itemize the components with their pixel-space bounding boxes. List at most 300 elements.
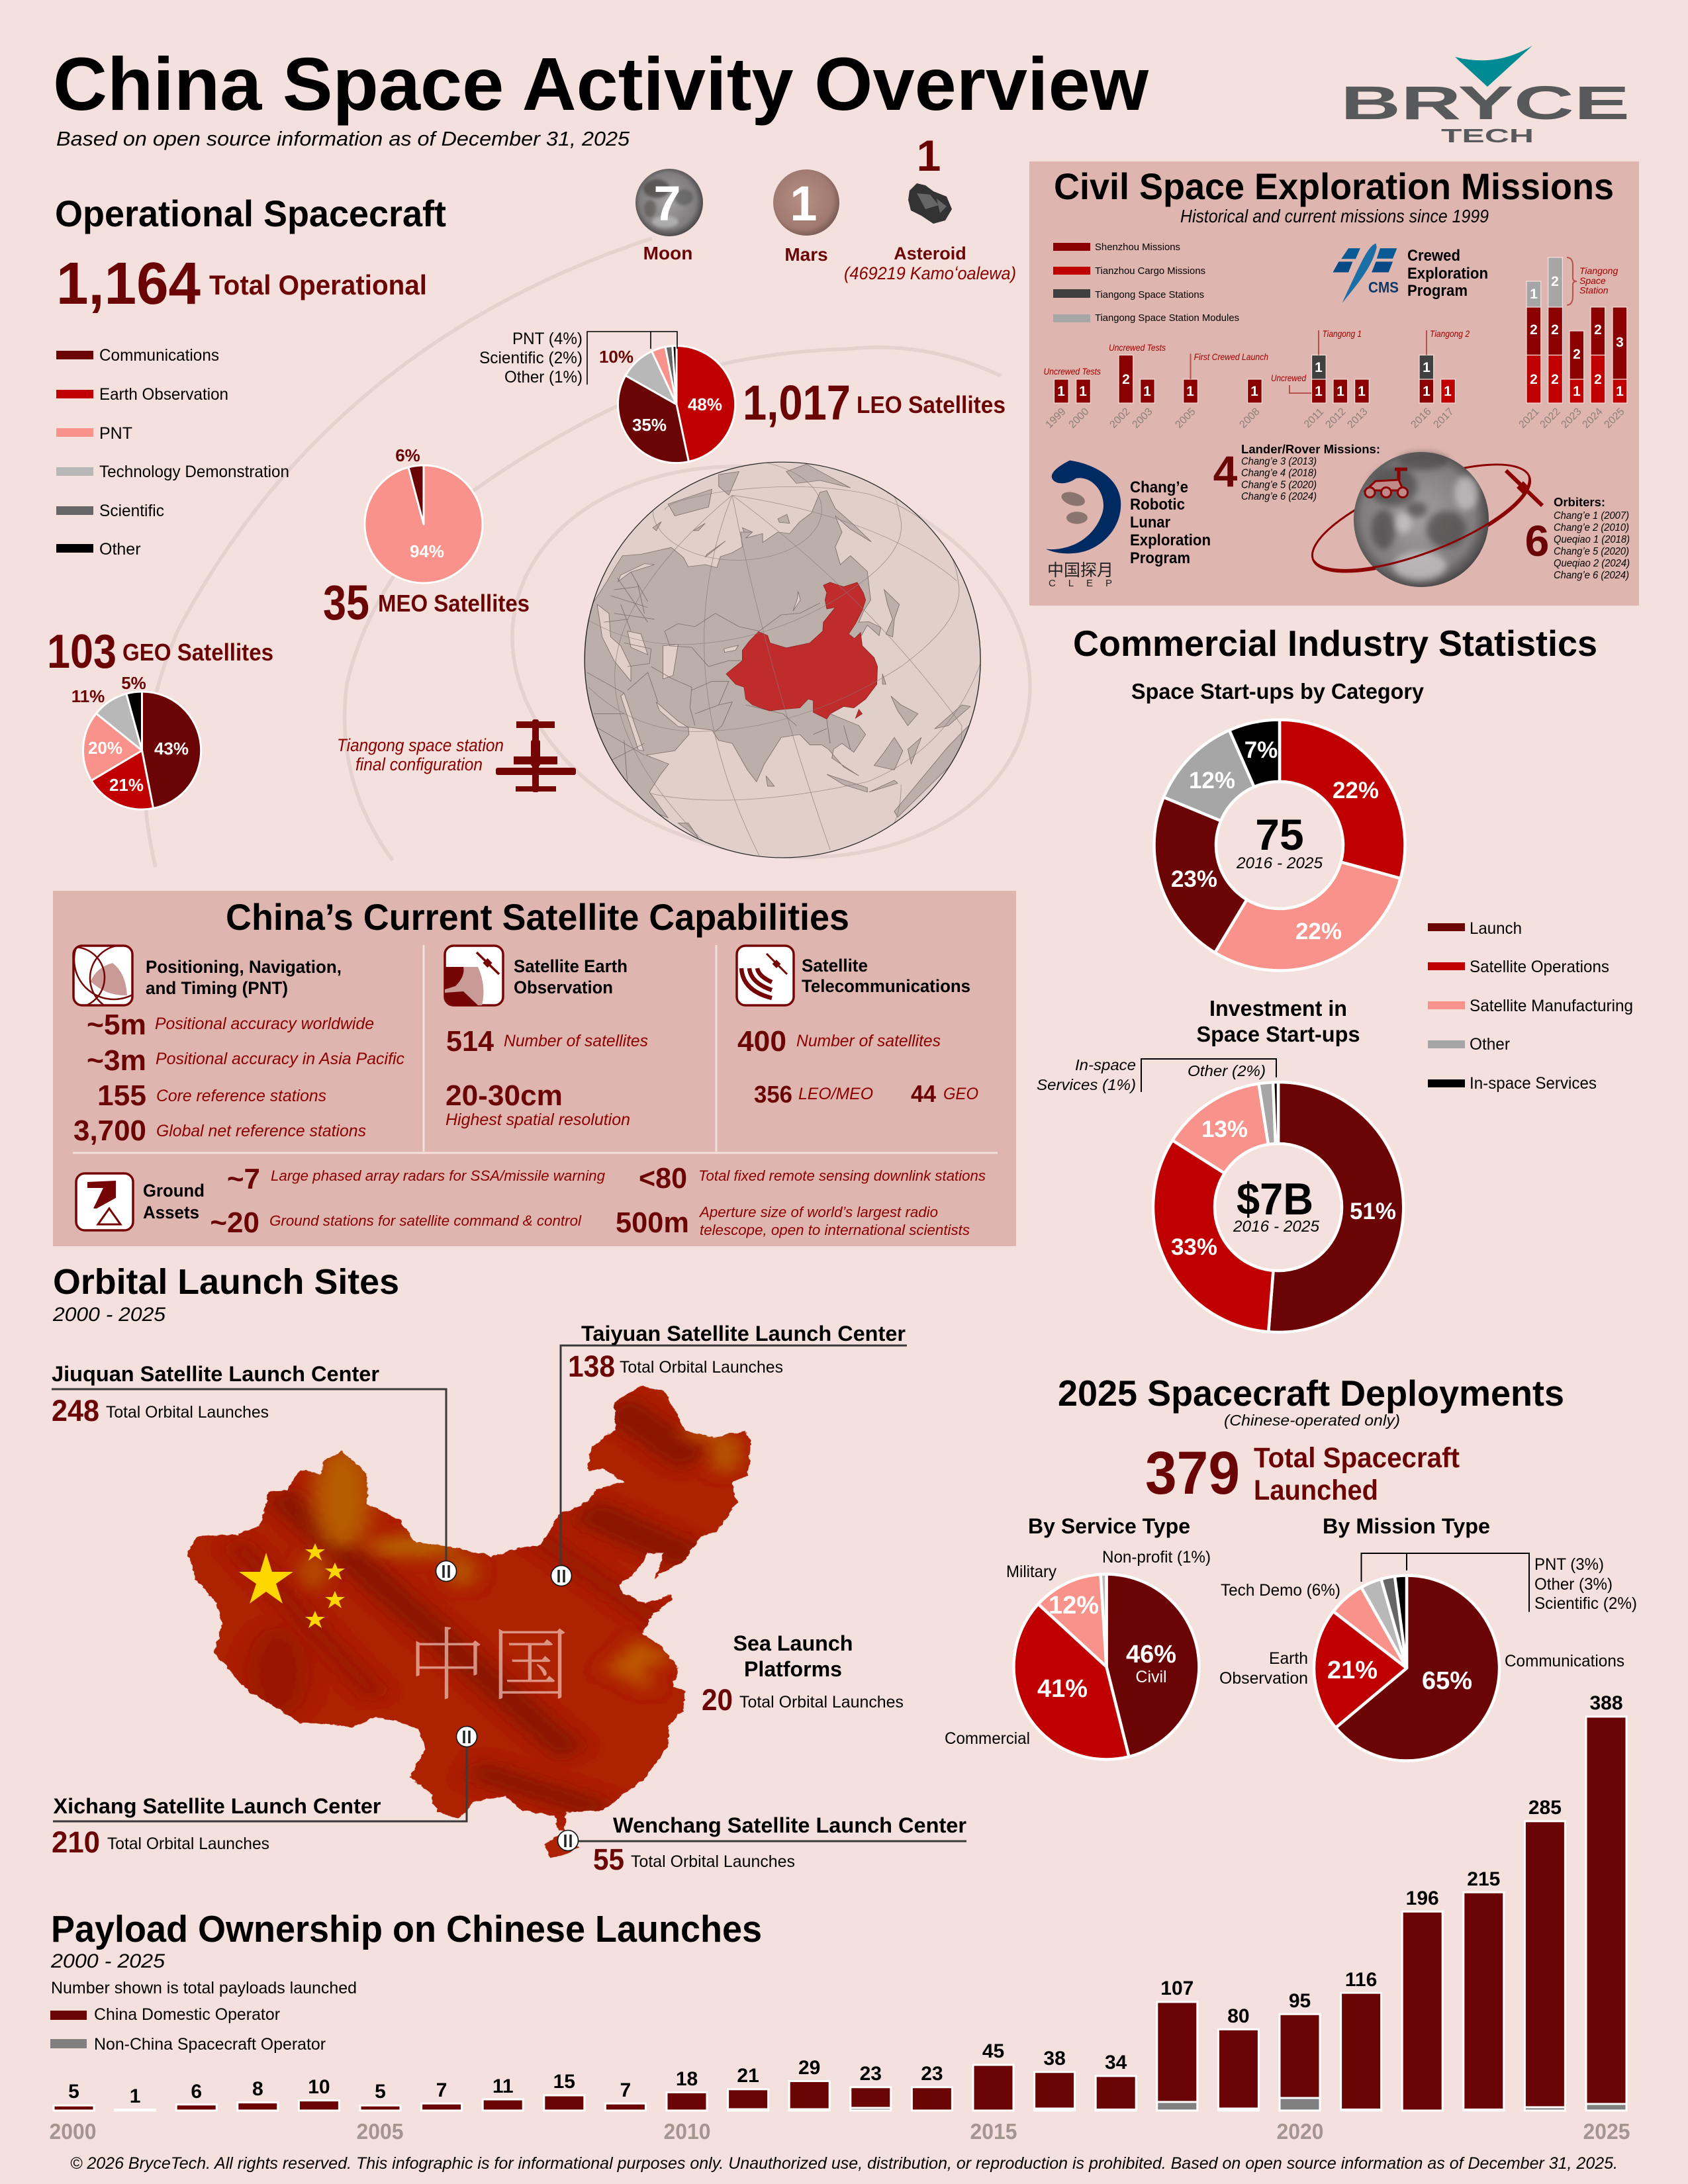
bar: 2017: 34 (1105, 2052, 1127, 2073)
pie: LEO satellites (479, 330, 735, 463)
site: sea launch: Sea Launch (733, 1631, 853, 1655)
site: sea launch (702, 1631, 904, 1717)
stat: lander missions: Chang’e 5 (2020) (1241, 479, 1317, 491)
bar: 2011: 21 (737, 2065, 759, 2087)
bar: 2016: 38 (1043, 2048, 1066, 2070)
donut: investment: 33% (1171, 1234, 1217, 1260)
icon: mars with count (773, 169, 839, 265)
label: PNT (146, 957, 342, 998)
bar chart: crewed missions by year: Uncrewed (1271, 373, 1307, 383)
pie: GEO satellites: 20% (88, 738, 122, 758)
site: Jiuquan: 248 (52, 1394, 99, 1428)
stats: telecommunications: 44 (911, 1080, 936, 1107)
legend: spacecraft mission: PNT (99, 424, 132, 443)
bar chart: crewed missions by year: 1 (1250, 384, 1258, 399)
land borders (587, 572, 851, 785)
label: LEO satellites: 1,017 (743, 375, 851, 430)
logo: CMS (1333, 244, 1399, 303)
bar: 2020 (1280, 1990, 1320, 2111)
axis: year labels: 2005 (356, 2119, 404, 2144)
site: sea launch: 20 (702, 1683, 733, 1717)
label: crewed exploration program (1407, 247, 1488, 300)
logo: BryceTech: BRYCE (1340, 77, 1630, 130)
legend: spacecraft mission: Scientific (99, 502, 164, 520)
legend: commercial: In-space Services (1470, 1074, 1597, 1093)
bar: 2004: 10 (308, 2076, 330, 2098)
stats: PNT: Core reference stations (156, 1087, 326, 1105)
bar: 2015 (973, 2040, 1013, 2111)
heading: operational spacecraft: Operational Spacecraft (55, 193, 446, 234)
pie: mission type: Observation (1219, 1669, 1308, 1688)
bar chart: crewed missions by year: Uncrewed Tests (1043, 366, 1101, 377)
bar: 2011 (728, 2065, 769, 2111)
icon: orbiter satellite (1506, 471, 1542, 506)
legend: spacecraft mission (56, 346, 289, 559)
stat: lander missions: Chang’e 4 (2018) (1241, 467, 1317, 479)
logo: CLEP: CLEP (1049, 578, 1112, 589)
stat: total spacecraft launched: Launched (1254, 1475, 1378, 1506)
label: earth observation: Observation (514, 978, 613, 997)
stats: PNT: Positional accuracy worldwide (155, 1015, 374, 1033)
footer: © 2026 BryceTech. All rights reserved. This infographic is for informational purposes only. Unauthorized use, distribution, or reproduction is prohibited. Based on open source information as of December 31, 2025. (70, 2154, 1618, 2173)
logo: BryceTech (1340, 46, 1630, 147)
bar chart: crewed missions by year: 1 (1423, 360, 1430, 375)
label: GEO satellites (47, 625, 273, 678)
site: Wenchang (578, 1813, 966, 1876)
label: earth observation: Satellite Earth (514, 956, 628, 976)
pie: LEO satellites: PNT (4%) (512, 330, 583, 348)
legend: spacecraft mission: Technology Demonstration (99, 463, 289, 481)
pie: LEO satellites: 35% (632, 415, 667, 435)
bar chart: crewed missions by year: 2 (1551, 274, 1559, 289)
bar chart: crewed missions by year: 2 (1551, 322, 1559, 338)
pie: MEO satellites: 94% (410, 541, 444, 561)
bar: 2005 (360, 2081, 400, 2111)
china highlight (726, 582, 878, 719)
legend: spacecraft mission: Communications (99, 346, 219, 365)
legend: payload: Non-China Spacecraft Operator (94, 2035, 326, 2054)
site: Taiyuan: 138 (568, 1349, 615, 1383)
icon: asteroid with count (844, 131, 1016, 283)
donut: investment: 13% (1201, 1116, 1248, 1142)
moon with orbit (1300, 443, 1542, 594)
icon: moon with count: Moon (643, 243, 692, 263)
bar chart: crewed missions by year: Tiangong (1579, 265, 1618, 276)
bar chart: crewed missions by year: 1 (1358, 384, 1366, 399)
heading: civil space: Civil Space Exploration Missions (1054, 165, 1614, 207)
site: Jiuquan (52, 1362, 446, 1563)
stats: PNT: ~5m (87, 1009, 146, 1041)
axis: year labels: 2000 (49, 2119, 97, 2144)
bar chart: crewed missions by year: 1 (1336, 384, 1344, 399)
map: China flag (174, 1381, 762, 1863)
axis: year labels: 2025 (1583, 2119, 1630, 2144)
label: Chang'e program: Robotic (1130, 496, 1185, 514)
bar chart: crewed missions by year: 1 (1423, 384, 1430, 399)
site: Taiyuan: Taiyuan Satellite Launch Center (581, 1322, 906, 1345)
bar: 2020: 95 (1289, 1990, 1311, 2012)
legend: civil missions: Tianzhou Cargo Missions (1095, 265, 1205, 277)
bar: 2004 (299, 2076, 339, 2111)
flag stars (239, 1543, 345, 1628)
pie: mission type: 65% (1422, 1667, 1472, 1695)
callout: investment small slices: Other (2%) (1188, 1062, 1266, 1079)
axis: year labels: 2015 (970, 2119, 1017, 2144)
heading: orbital launch sites: 2000 - 2025 (52, 1304, 165, 1326)
pie: mission type: Scientific (2%) (1534, 1594, 1637, 1613)
heading: commercial industry: Commercial Industry Statistics (1073, 623, 1597, 664)
panel: civil space exploration (1029, 161, 1639, 606)
bar chart: crewed missions by year: 2 (1594, 372, 1602, 387)
bar: 2019: 80 (1227, 2005, 1250, 2027)
label: Tiangong station (337, 735, 504, 774)
pie: mission type: Earth (1269, 1649, 1308, 1668)
bar chart: crewed missions by year: 1 (1616, 384, 1624, 399)
stats: ground assets: ~7 (227, 1163, 260, 1195)
legend: commercial: Launch (1470, 919, 1522, 938)
pie: mission type: Tech Demo (6%) (1221, 1581, 1340, 1600)
bar chart: crewed missions by year: 1 (1186, 384, 1194, 399)
pie: service type: 46% (1126, 1641, 1176, 1668)
pie: service type: 41% (1037, 1675, 1088, 1703)
bar chart: crewed missions by year: 2024 (1580, 406, 1605, 431)
stat: lander missions: Chang’e 3 (2013) (1241, 456, 1317, 467)
bar: 2008 (544, 2071, 585, 2111)
label: telecommunications (802, 956, 970, 996)
stat: orbiters: Chang’e 6 (2024) (1554, 570, 1629, 581)
donut: start-ups by category: 12% (1189, 768, 1235, 794)
stat: lander missions (1213, 443, 1380, 502)
bar: 2014: 23 (921, 2063, 943, 2085)
label: MEO satellites (323, 575, 530, 630)
graticule (587, 460, 980, 856)
bar: 2015: 45 (982, 2040, 1004, 2062)
stats: ground assets: Large phased array radars for SSA/missile warning (271, 1167, 606, 1184)
bar: 2022 (1402, 1888, 1442, 2111)
bar chart: crewed missions by year: 1 (1530, 287, 1538, 302)
stats: telecommunications: LEO/MEO (798, 1085, 873, 1103)
bar: 2018: 107 (1160, 1978, 1194, 1999)
pins: launch sites (436, 1561, 579, 1850)
label: crewed exploration program: Program (1407, 282, 1468, 300)
bar: 2019 (1218, 2005, 1258, 2111)
legend: civil missions: Tiangong Space Station Modules (1095, 312, 1239, 324)
stats: ground assets: ~20 (210, 1206, 259, 1239)
label: GEO satellites: 103 (47, 625, 117, 678)
legend: commercial: Satellite Manufacturing (1470, 997, 1633, 1015)
stats: PNT: 155 (97, 1079, 146, 1112)
bar chart: crewed missions by year: 1 (1444, 384, 1452, 399)
heading: investment (1197, 996, 1360, 1046)
stat: orbiters: Orbiters: (1554, 496, 1605, 509)
pie: MEO satellites (365, 445, 483, 583)
bar chart: crewed missions by year: 2022 (1538, 406, 1563, 431)
icon: earth observation (445, 946, 503, 1005)
bar: 2022: 196 (1406, 1888, 1439, 1909)
bar chart: crewed missions by year: Uncrewed Tests (1109, 342, 1166, 353)
bar: 2009: 7 (620, 2079, 631, 2101)
bar: 2010 (667, 2068, 707, 2111)
bar: 2012 (789, 2057, 829, 2111)
bar chart: crewed missions by year: Tiangong 2 (1430, 328, 1470, 339)
bar chart: crewed missions by year: 1 (1573, 384, 1581, 399)
pie: service type: Commercial (945, 1729, 1030, 1748)
stat: orbiters: Chang’e 2 (2010) (1554, 522, 1629, 533)
label: Chang'e program: Lunar (1130, 514, 1170, 531)
bar: 2014 (912, 2063, 952, 2111)
site: Wenchang: 55 (593, 1843, 624, 1876)
bar: 2013: 23 (860, 2063, 882, 2085)
label: Chang'e program: Exploration (1130, 531, 1211, 549)
site: Wenchang: Total Orbital Launches (631, 1852, 795, 1871)
bar: 2024 (1524, 1797, 1565, 2111)
legend: payload: China Domestic Operator (94, 2005, 280, 2024)
pie: mission type: Communications (1505, 1652, 1624, 1670)
donut: start-ups by category (1154, 719, 1405, 970)
legend: commercial: Other (1470, 1035, 1510, 1054)
site: Xichang: Xichang Satellite Launch Center (53, 1794, 381, 1818)
label: telecommunications: Satellite (802, 956, 868, 976)
bar: 2025: 388 (1589, 1692, 1623, 1714)
site: Xichang: Total Orbital Launches (107, 1835, 269, 1853)
bar: 2017 (1096, 2052, 1136, 2111)
stat: orbiters: Chang’e 5 (2020) (1554, 546, 1629, 557)
pie: mission type: 21% (1327, 1657, 1378, 1684)
bar: 2009 (605, 2079, 645, 2111)
legend: spacecraft mission: Earth Observation (99, 385, 228, 404)
subtitle: Based on open source information as of December 31, 2025 (56, 127, 630, 150)
orbit arcs (145, 238, 1067, 904)
heading: 2025 deployments: (Chinese-operated only) (1224, 1412, 1400, 1429)
callout: investment small slices: In-space (1075, 1056, 1136, 1073)
label: crewed exploration program: Exploration (1407, 265, 1488, 283)
bar: 2005: 5 (375, 2081, 386, 2103)
pie: mission type (1219, 1514, 1637, 1761)
logo: CLEP (1046, 461, 1121, 589)
bar chart: payloads by year (54, 1692, 1626, 2111)
bar chart: crewed missions by year (1043, 257, 1627, 431)
bar: 2023: 215 (1467, 1868, 1500, 1890)
bar: 2024: 285 (1528, 1797, 1562, 1819)
total operational: 1,164 (56, 251, 201, 317)
stat: total spacecraft launched: Total Spacecraft (1254, 1442, 1460, 1474)
bar chart: crewed missions by year: 2016 (1409, 406, 1434, 431)
stat: orbiters: 6 (1525, 516, 1549, 565)
logo: BryceTech: TECH (1441, 126, 1534, 147)
bar chart: crewed missions by year: Station (1579, 285, 1609, 296)
title: China Space Activity Overview (53, 42, 1149, 126)
label: LEO satellites (743, 375, 1006, 430)
label: PNT: Positioning, Navigation, (146, 957, 342, 977)
label: Tiangong station: Tiangong space station (337, 735, 504, 755)
stat: orbiters: Queqiao 1 (2018) (1554, 534, 1630, 545)
icon: moon with count (635, 169, 703, 263)
heading: payload ownership: Number shown is total payloads launched (51, 1979, 357, 1997)
axis: year labels (49, 2119, 1630, 2144)
stat: lander missions: Lander/Rover Missions: (1241, 443, 1380, 456)
bar: 2002: 6 (191, 2081, 202, 2103)
bar chart: crewed missions by year: 2025 (1602, 406, 1627, 431)
label: LEO satellites: LEO Satellites (857, 391, 1006, 418)
stat: orbiters (1525, 496, 1630, 581)
label: telecommunications: Telecommunications (802, 976, 970, 996)
donut: start-ups by category: 2016 - 2025 (1236, 854, 1323, 872)
site: Taiyuan (561, 1322, 907, 1567)
bar chart: crewed missions by year: 1 (1315, 360, 1323, 375)
legend: commercial (1428, 919, 1633, 1093)
pie: LEO satellites: 48% (688, 394, 722, 414)
bar: 2007: 11 (492, 2075, 514, 2097)
donut: investment: 2016 - 2025 (1233, 1218, 1320, 1236)
stats: PNT: Global net reference stations (156, 1122, 366, 1140)
icon: asteroid with count: 1 (917, 131, 941, 180)
stats: ground assets: Total fixed remote sensing downlink stations (698, 1167, 986, 1184)
stats: PNT: Positional accuracy in Asia Pacific (156, 1050, 404, 1068)
stats: ground assets: telescope, open to international scientists (700, 1222, 970, 1238)
pie: service type: Civil (1135, 1668, 1167, 1686)
pie: LEO satellites: Other (1%) (504, 368, 583, 387)
stats: earth observation: 514 (446, 1025, 494, 1058)
legend: civil missions (1053, 242, 1239, 324)
bar chart: crewed missions by year: 2021 (1517, 406, 1542, 431)
bar chart: crewed missions by year: 1999 (1043, 406, 1068, 431)
pie: service type: By Service Type (1028, 1514, 1190, 1538)
icon: mars with count: 1 (790, 176, 818, 231)
legend: spacecraft mission: Other (99, 540, 141, 559)
bar: 2000: 5 (68, 2081, 79, 2103)
stats: telecommunications (737, 1025, 978, 1108)
callout: investment small slices: Services (1%) (1037, 1076, 1136, 1093)
donut: start-ups by category: 22% (1333, 778, 1379, 803)
stats: ground assets: <80 (639, 1162, 687, 1195)
bar chart: crewed missions by year: 2002 (1107, 406, 1133, 431)
bar: 2010: 18 (676, 2068, 698, 2090)
bar chart: crewed missions by year: 2 (1551, 372, 1559, 387)
pie: service type: 12% (1049, 1592, 1099, 1619)
label: Chang'e program: Program (1130, 549, 1190, 567)
donut: start-ups by category: 23% (1171, 866, 1217, 892)
bar: 2002 (176, 2081, 216, 2111)
bar: 2012: 29 (798, 2057, 820, 2079)
stat: lander missions: Chang’e 6 (2024) (1241, 491, 1317, 502)
bar chart: crewed missions by year: 2 (1122, 372, 1130, 387)
map characters: 中国 (407, 1602, 574, 1716)
bar chart: crewed missions by year: 1 (1315, 384, 1323, 399)
label: GEO satellites: GEO Satellites (122, 639, 273, 666)
bar chart: crewed missions by year: 2012 (1323, 406, 1348, 431)
pie: LEO satellites: 10% (599, 347, 633, 367)
pie: service type: Non-profit (1%) (1102, 1548, 1211, 1567)
stats: PNT: 3,700 (73, 1115, 146, 1147)
heading: payload ownership (50, 1908, 762, 1997)
bar chart: crewed missions by year: 2 (1594, 322, 1602, 338)
axis: year labels: 2010 (663, 2119, 711, 2144)
subheading: civil space: Historical and current missions since 1999 (1180, 206, 1489, 226)
icon: mars with count: Mars (784, 244, 828, 265)
donut: investment (1153, 1082, 1403, 1332)
total operational (56, 251, 427, 317)
stats: PNT (73, 1009, 404, 1147)
donut: start-ups by category: 75 (1255, 810, 1304, 859)
stats: telecommunications: 356 (754, 1081, 792, 1108)
legend: payload (50, 2005, 326, 2054)
stats: earth observation: 20-30cm (445, 1079, 563, 1112)
icon: rover (1365, 469, 1407, 498)
pie: GEO satellites: 11% (71, 686, 105, 706)
label: ground assets: Ground (143, 1181, 205, 1201)
bar: 2006 (422, 2079, 462, 2111)
bar chart: crewed missions by year: 2011 (1302, 406, 1326, 430)
heading: 2025 deployments: 2025 Spacecraft Deployments (1058, 1373, 1564, 1414)
heading: orbital launch sites: Orbital Launch Sites (53, 1262, 399, 1302)
bar: 2003 (238, 2078, 278, 2111)
stat: total spacecraft launched: 379 (1145, 1439, 1240, 1507)
bar chart: crewed missions by year: 1 (1079, 384, 1087, 399)
icon: asteroid with count: Asteroid (894, 244, 966, 263)
bar chart: crewed missions by year: 2000 (1066, 406, 1092, 431)
stats: telecommunications: Number of satellites (796, 1032, 941, 1050)
icon: telecommunications (737, 946, 794, 1005)
panel: satellite capabilities (44, 891, 1016, 1246)
donut: investment: 51% (1350, 1199, 1396, 1224)
stats: earth observation: Highest spatial resolution (445, 1111, 630, 1129)
stats: earth observation: Number of satellites (504, 1032, 648, 1050)
pie: service type: Military (1006, 1563, 1056, 1581)
site: sea launch: Total Orbital Launches (739, 1693, 904, 1711)
label: ground assets (143, 1181, 205, 1222)
label: MEO satellites: 35 (323, 575, 369, 630)
bar: 2001: 1 (130, 2085, 140, 2107)
bar chart: crewed missions by year: 2005 (1173, 406, 1198, 431)
pie: GEO satellites (71, 673, 201, 809)
bar: 2016 (1035, 2048, 1075, 2111)
site: Wenchang: Wenchang Satellite Launch Center (613, 1813, 966, 1837)
label: ground assets: Assets (143, 1203, 199, 1222)
donut: start-ups by category: 7% (1244, 737, 1278, 763)
logo: CLEP: 中国探月 (1047, 561, 1113, 580)
bar chart: crewed missions by year: 2 (1573, 347, 1581, 362)
pie: mission type: PNT (3%) (1534, 1555, 1604, 1574)
bar: 2023 (1464, 1868, 1504, 2111)
site: Jiuquan: Jiuquan Satellite Launch Center (52, 1362, 379, 1386)
heading: payload ownership: Payload Ownership on Chinese Launches (51, 1908, 762, 1950)
land: Eurasia and Africa (563, 491, 881, 818)
bar: 2006: 7 (436, 2079, 447, 2101)
donut: start-ups by category: 22% (1295, 919, 1342, 944)
bar chart: crewed missions by year: 3 (1616, 335, 1624, 350)
bar: 2018 (1157, 1978, 1197, 2111)
site: Taiyuan: Total Orbital Launches (620, 1358, 783, 1377)
bar chart: crewed missions by year: 2 (1530, 322, 1538, 338)
bar: 2001 (115, 2085, 156, 2111)
pie: GEO satellites: 21% (109, 775, 144, 795)
stats: telecommunications: 400 (737, 1025, 786, 1058)
bar: 2025 (1586, 1692, 1626, 2111)
stats: ground assets: Ground stations for satellite command & control (269, 1212, 582, 1229)
heading: investment: Investment in (1209, 996, 1347, 1021)
stats: ground assets: Aperture size of world’s largest radio (698, 1204, 938, 1220)
heading: start-ups by category: Space Start-ups by Category (1131, 679, 1425, 704)
label: Chang'e program (1130, 478, 1211, 567)
callout: investment small slices (1037, 1056, 1276, 1093)
bar chart: crewed missions by year: 2017 (1431, 406, 1456, 431)
stats: ground assets: 500m (616, 1206, 689, 1239)
bar: 2013 (851, 2063, 891, 2111)
icon: asteroid with count: (469219 Kamoʻoalewa) (844, 263, 1016, 283)
total operational: Total Operational (209, 269, 427, 300)
label: MEO satellites: MEO Satellites (378, 590, 530, 617)
pie: mission type: By Mission Type (1323, 1514, 1490, 1538)
